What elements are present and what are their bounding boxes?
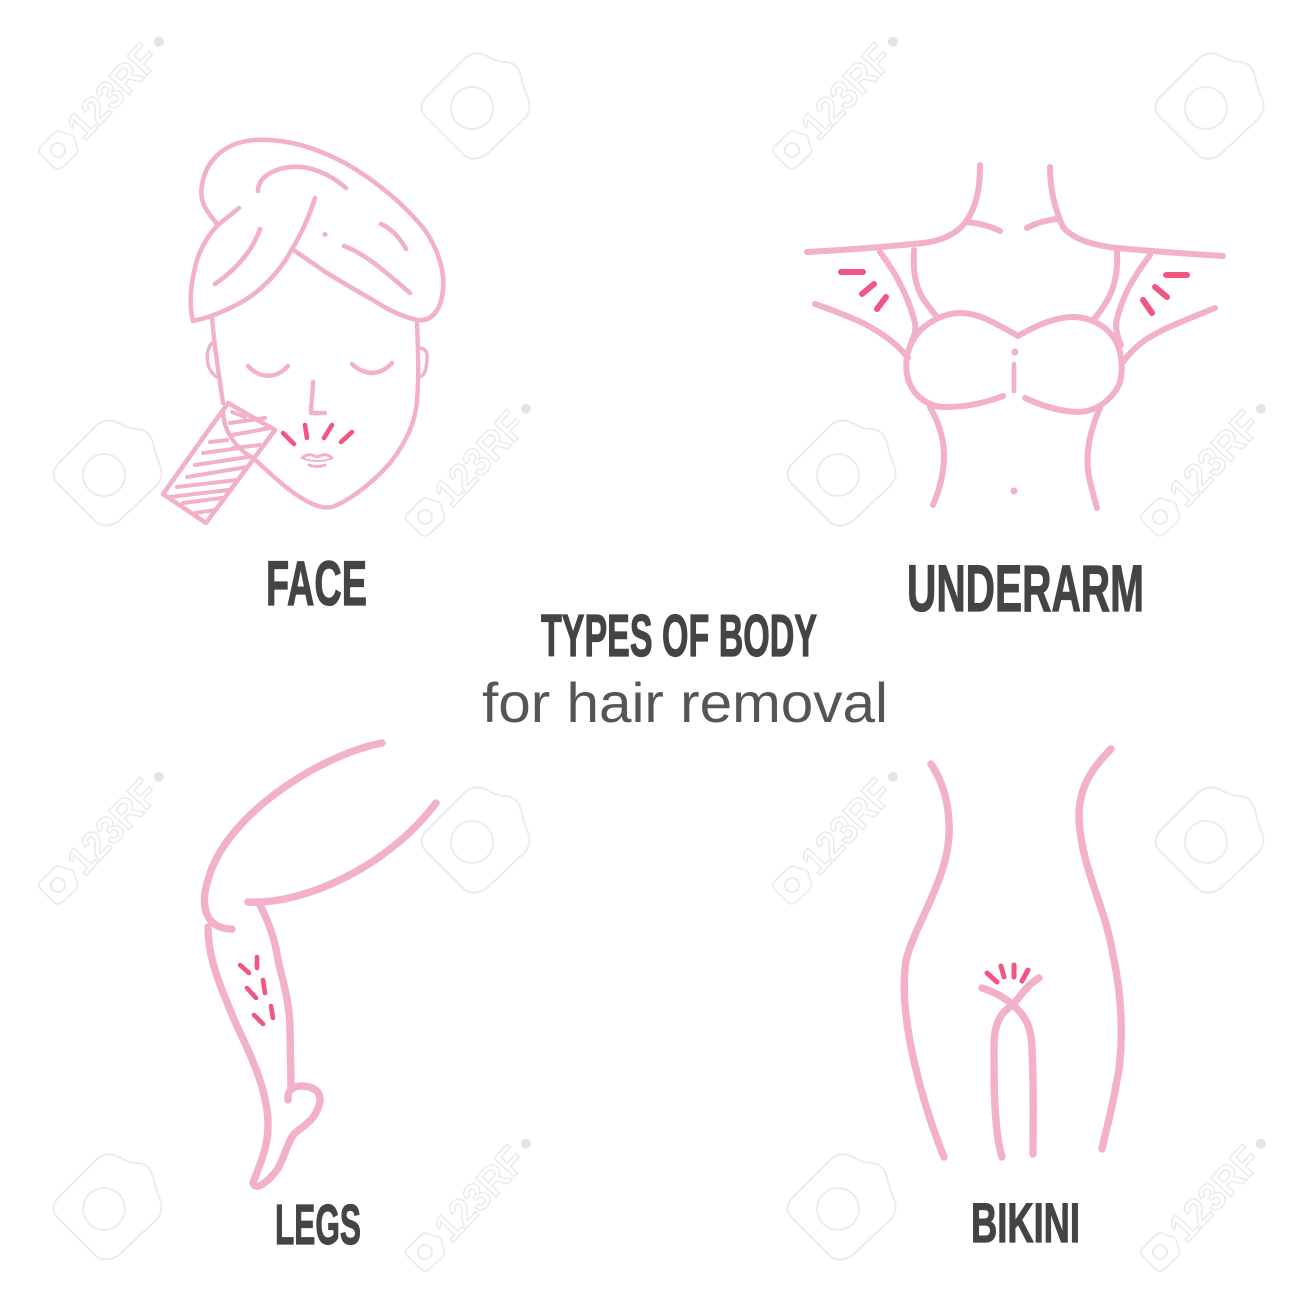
label: BIKINI: BIKINI <box>971 1191 1080 1254</box>
watermark layer: 123RF <box>426 1138 535 1250</box>
label: FACE: FACE <box>266 549 367 619</box>
hair marks: bikini line <box>987 965 1028 982</box>
watermark layer: 123RF <box>1161 403 1270 515</box>
icon: bent leg <box>205 743 436 1186</box>
title: for hair removal <box>482 671 888 734</box>
title: TYPES OF BODY <box>541 603 817 669</box>
watermark layer: 123RF <box>793 771 902 883</box>
watermark layer: 123RF <box>793 36 902 148</box>
watermark layer: 123RF <box>1161 1138 1270 1250</box>
watermark layer: 123RF <box>59 771 168 883</box>
label: LEGS: LEGS <box>275 1193 361 1257</box>
hair marks: upper lip <box>283 425 352 444</box>
title <box>482 603 888 734</box>
watermark layer: 123RF <box>426 403 535 515</box>
hair marks: shin <box>240 957 273 1024</box>
face outline <box>207 317 427 507</box>
icon: underarm torso <box>807 165 1223 508</box>
towel <box>191 140 443 321</box>
hair marks: underarms <box>841 272 1187 313</box>
wax strip <box>163 403 275 523</box>
icon: bikini area hips <box>904 749 1121 1157</box>
icon: face with towel and wax strip <box>163 140 443 523</box>
label: UNDERARM: UNDERARM <box>907 551 1144 625</box>
watermark layer: 123RF <box>59 36 168 148</box>
